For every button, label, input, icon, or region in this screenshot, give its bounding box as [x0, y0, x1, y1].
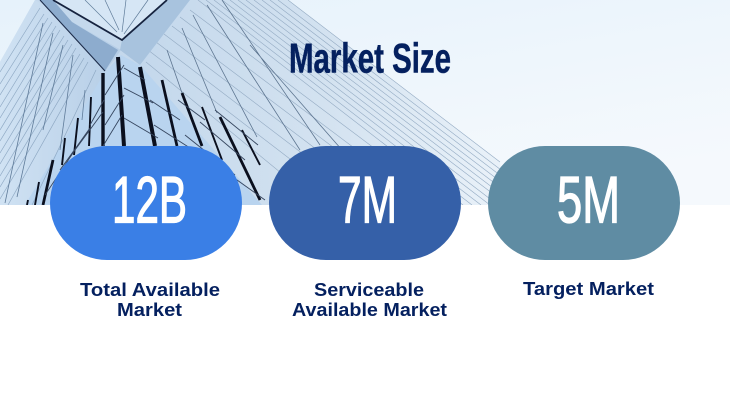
title: Market Size — [289, 34, 451, 82]
label: total available market: Market — [117, 300, 182, 320]
background photo: skyscraper — [0, 0, 730, 205]
label: serviceable available market — [292, 280, 447, 320]
value: 7M: 7M — [338, 162, 397, 236]
icon: V-shaped roof detail — [40, 0, 190, 71]
value: 12B: 12B — [112, 162, 187, 236]
pill: total available market — [50, 146, 242, 260]
label: serviceable available market: Available Market — [292, 300, 447, 320]
pill: target market — [488, 146, 680, 260]
label: target market: Target Market — [523, 279, 654, 299]
value: 5M: 5M — [557, 162, 620, 236]
label: total available market: Total Available — [80, 280, 220, 300]
pill: serviceable available market — [269, 146, 461, 260]
label: total available market — [80, 280, 220, 320]
white lower background — [0, 205, 730, 411]
label: serviceable available market: Serviceable — [314, 280, 424, 300]
